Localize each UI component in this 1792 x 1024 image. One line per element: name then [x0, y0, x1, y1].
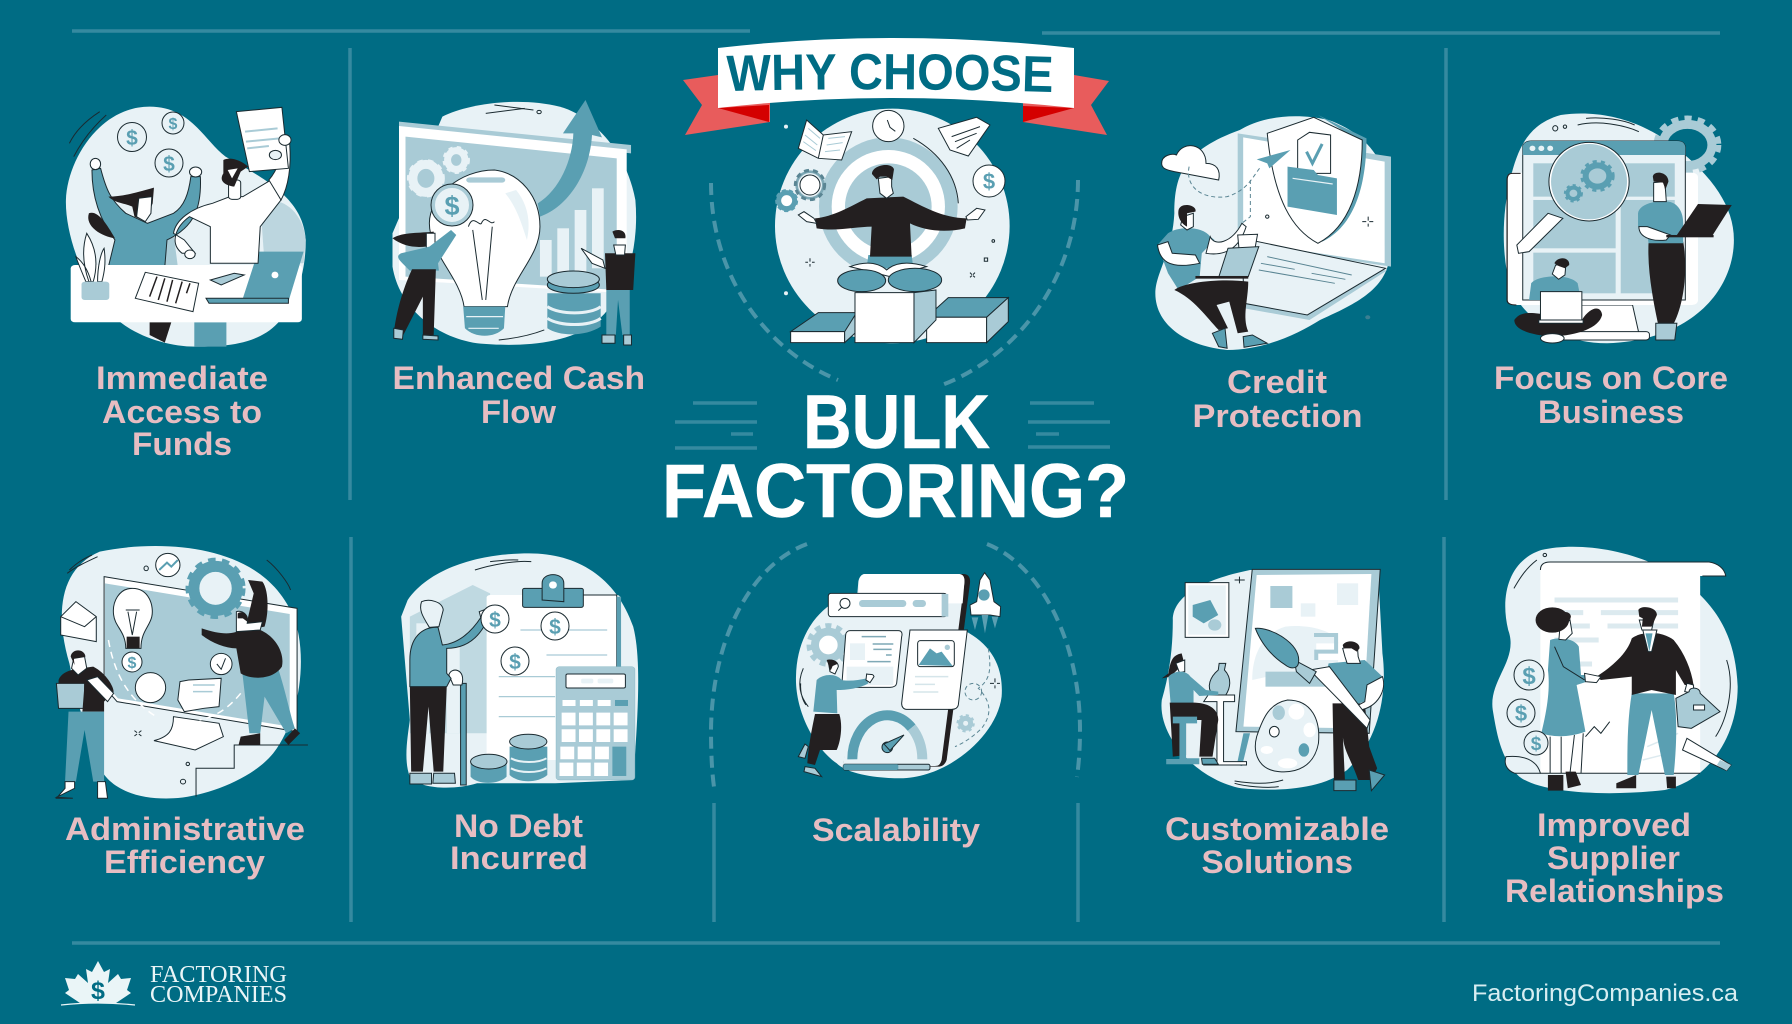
label: Administrative	[65, 811, 305, 847]
label: Incurred	[450, 840, 588, 876]
website url: FactoringCompanies.ca	[1472, 980, 1739, 1007]
illustration: celebrating people at desk	[66, 107, 306, 347]
label	[65, 811, 305, 880]
label: Supplier	[1547, 840, 1680, 876]
coin: $	[128, 655, 137, 672]
illustration: tablet, speedometer and rocket	[796, 573, 1002, 778]
panel: improved supplier relationships	[1492, 547, 1738, 909]
label	[1165, 811, 1389, 880]
label: Solutions	[1202, 844, 1353, 880]
illustration: magnifier and browser window	[1504, 113, 1734, 343]
coins: $	[489, 609, 501, 632]
coins	[1507, 660, 1548, 755]
label: Immediate	[96, 360, 268, 396]
icon: maple leaf	[61, 961, 135, 1005]
coin: $	[444, 191, 460, 221]
panel: focus on core business	[1494, 113, 1734, 430]
panel: no debt incurred	[401, 553, 638, 876]
illustration: canvas, palette and brush	[1161, 569, 1385, 791]
coins	[481, 605, 569, 675]
logo: factoring companies	[61, 961, 287, 1008]
coins: $	[1515, 701, 1527, 726]
label: Flow	[481, 394, 556, 430]
label	[1494, 360, 1728, 430]
coins: $	[509, 651, 521, 674]
illustration: meditating person (center)	[775, 109, 1010, 343]
label: No Debt	[454, 808, 583, 844]
label: Customizable	[1165, 811, 1389, 847]
panel: immediate access to funds	[66, 107, 306, 462]
label: Credit	[1227, 364, 1327, 400]
illustration: handshake in front of scroll	[1492, 547, 1738, 793]
coins	[118, 112, 184, 177]
label	[392, 360, 645, 430]
title: bulk factoring: FACTORING?	[662, 449, 1129, 534]
logo: factoring companies: FACTORING	[150, 962, 287, 988]
logo: factoring companies: COMPANIES	[150, 982, 287, 1008]
label: Focus on Core	[1494, 360, 1728, 396]
banner: Why Choose	[683, 38, 1109, 135]
heading: why choose: WHY CHOOSE	[726, 54, 1052, 92]
panel: customizable solutions	[1161, 569, 1389, 880]
coin: dollar	[973, 165, 1005, 197]
label: Scalability	[812, 812, 980, 848]
illustration: clipboard, calculator and older man	[401, 553, 638, 788]
panel: credit protection	[1155, 115, 1391, 434]
label: Efficiency	[104, 844, 265, 880]
coins: $	[1531, 734, 1542, 755]
label	[1505, 807, 1724, 909]
coin	[122, 652, 142, 672]
title: bulk factoring: BULK	[803, 380, 990, 465]
label: Access to	[102, 394, 262, 430]
coins: $	[549, 616, 561, 639]
coins: $	[169, 116, 178, 133]
label	[96, 360, 268, 462]
coin	[431, 184, 473, 226]
label: Relationships	[1505, 873, 1724, 909]
panel: enhanced cash flow	[392, 100, 645, 430]
label: Improved	[1537, 807, 1691, 843]
label: Protection	[1192, 398, 1362, 434]
illustration: shield and laptop	[1155, 115, 1391, 350]
illustration: light bulb and growth chart	[392, 100, 636, 345]
label: Funds	[132, 426, 232, 462]
coin: dollar: $	[983, 169, 995, 194]
illustration: monitor, gear and stairs	[56, 546, 308, 798]
label: Business	[1538, 394, 1684, 430]
label: Enhanced Cash	[392, 360, 645, 396]
title: bulk factoring	[662, 380, 1129, 534]
panel: administrative efficiency	[56, 546, 308, 880]
label	[1192, 364, 1362, 434]
coins: $	[126, 127, 138, 150]
icon: maple leaf: $	[91, 977, 105, 1005]
coins: $	[1522, 663, 1536, 690]
label	[450, 808, 588, 876]
coins: $	[163, 153, 175, 176]
panel: scalability	[796, 573, 1002, 848]
